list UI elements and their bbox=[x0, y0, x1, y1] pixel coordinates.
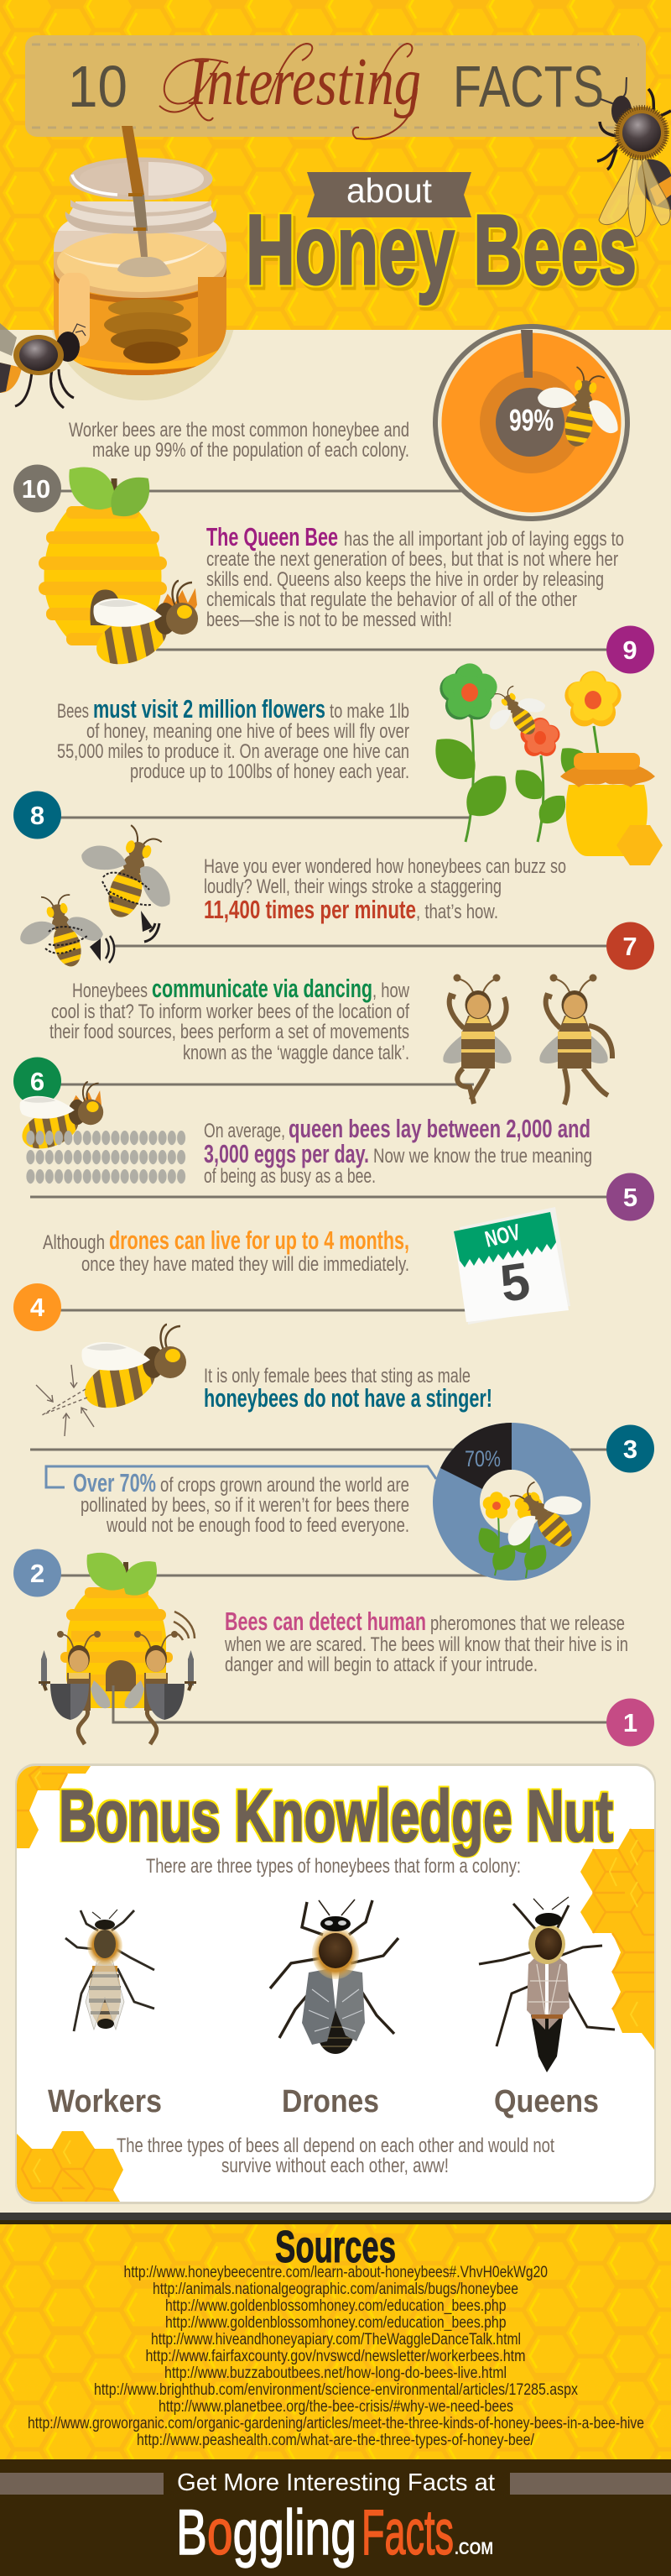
fact 3: divider line bbox=[30, 1449, 608, 1450]
fact 6: text: Honeybees bbox=[72, 980, 148, 1002]
fact 6: number badge bbox=[13, 1058, 61, 1105]
fact 8: number badge: 8 bbox=[30, 801, 44, 830]
icon: hive guarded by soldier bees bbox=[39, 1542, 196, 1744]
fact 6: number badge: 6 bbox=[30, 1067, 44, 1096]
title panel bbox=[25, 35, 646, 137]
fact 1: number badge bbox=[606, 1699, 654, 1746]
fact 9: text: chemicals that regulate the behavior of all of the other bbox=[206, 588, 577, 611]
fact 2: text: Over 70% bbox=[73, 1468, 156, 1497]
sources list: http://www.fairfaxcounty.gov/nvswcd/newsletter/workerbees.htm bbox=[146, 2348, 525, 2365]
fact 7: number badge bbox=[606, 922, 654, 970]
fact 5: text: 3,000 eggs per day. bbox=[204, 1139, 369, 1168]
fact 1: number badge: 1 bbox=[623, 1708, 637, 1737]
fact 2: number badge bbox=[13, 1549, 61, 1596]
fact 3: number badge: 3 bbox=[623, 1434, 637, 1464]
fact 8: number badge bbox=[13, 791, 61, 839]
fact 9: text: bees—she is not to be messed with! bbox=[206, 609, 452, 631]
fact 10: text bbox=[69, 419, 409, 462]
icon: bee in pie chart bbox=[530, 361, 627, 456]
about ribbon: about bbox=[346, 171, 433, 210]
fact 6: text: , how bbox=[372, 980, 410, 1002]
fact 6: text: cool is that? To inform worker bees of the location of bbox=[51, 1001, 409, 1023]
fact 8: text: 55,000 miles to produce it. On average one hive can bbox=[57, 740, 409, 763]
fact 6: text: communicate via dancing bbox=[152, 974, 372, 1003]
fact 1: text: danger and will begin to attack if your intrude. bbox=[225, 1654, 538, 1676]
icon: calendar NOV 5 bbox=[454, 1207, 570, 1325]
title: Interesting bbox=[159, 44, 421, 139]
label: Workers: Workers bbox=[48, 2084, 162, 2119]
bonus closing text: The three types of bees all depend on each other and would not bbox=[117, 2134, 554, 2157]
panel: bonus knowledge nut bbox=[15, 1763, 656, 2204]
fact 4: text: Although bbox=[43, 1231, 105, 1254]
illustration: queen bee bbox=[479, 1897, 615, 2072]
sources list: http://www.goldenblossomhoney.com/education_bees.php bbox=[165, 2314, 507, 2332]
fact 8: text: to make 1lb bbox=[330, 700, 409, 723]
bonus closing text: survive without each other, aww! bbox=[221, 2155, 449, 2177]
fact 9: number badge: 9 bbox=[622, 635, 637, 665]
sources list bbox=[28, 2264, 644, 2449]
70% label: 70% bbox=[465, 1446, 501, 1471]
fact 4: divider line bbox=[37, 1309, 466, 1311]
icon: calendar NOV 5: NOV bbox=[482, 1220, 523, 1252]
sources list: http://www.brighthub.com/environment/science-environmental/articles/17285.aspx bbox=[94, 2381, 578, 2399]
panel: footer bbox=[0, 2459, 671, 2576]
logo: BogglingFacts.com: .COM bbox=[455, 2539, 493, 2558]
fact 7: text bbox=[204, 855, 566, 924]
about ribbon bbox=[307, 171, 471, 217]
fact 6: text bbox=[49, 974, 410, 1064]
fact 3 text: sting: honeybees do not have a stinger! bbox=[204, 1383, 492, 1413]
fact 2: divider line bbox=[37, 1575, 491, 1576]
fact 2: text bbox=[73, 1468, 409, 1537]
sources list: http://www.planetbee.org/the-bee-crisis/#why-we-need-bees bbox=[159, 2398, 513, 2416]
fact 5: number badge bbox=[606, 1173, 654, 1220]
footer call to action: Get More Interesting Facts at bbox=[177, 2469, 495, 2496]
illustration: drone bee bbox=[270, 1899, 398, 2054]
fact 9: text: The Queen Bee bbox=[206, 522, 338, 551]
icon: flowers and bee in donut bbox=[473, 1464, 598, 1578]
fact 10: text: make up 99% of the population of each colony. bbox=[92, 439, 409, 462]
icon: jar shadow bbox=[52, 330, 233, 400]
sources list: http://www.peashealth.com/what-are-the-three-types-of-honey-bee/ bbox=[137, 2432, 535, 2449]
sources list: http://animals.nationalgeographic.com/animals/bugs/honeybee bbox=[153, 2281, 518, 2298]
illustration: worker bee bbox=[65, 1910, 154, 2031]
fact 8: text: Bees bbox=[57, 700, 89, 723]
label: Queens: Queens bbox=[494, 2084, 599, 2119]
sources list: http://www.hiveandhoneyapiary.com/TheWaggleDanceTalk.html bbox=[151, 2331, 521, 2349]
icon: flowers with bee and honey pot bbox=[424, 663, 663, 865]
icon: buzzing bees bbox=[11, 814, 188, 980]
bonus intro text: There are three types of honeybees that form a colony: bbox=[146, 1855, 521, 1878]
fact 5: number badge: 5 bbox=[623, 1183, 637, 1212]
title: 10: 10 bbox=[68, 54, 127, 119]
sources list: http://www.honeybeecentre.com/learn-about-honeybees#.VhvH0ekWg20 bbox=[124, 2264, 548, 2281]
fact 6: text: known as the ‘waggle dance talk’. bbox=[183, 1042, 409, 1064]
sources list: http://www.goldenblossomhoney.com/education_bees.php bbox=[165, 2297, 507, 2315]
donut chart 70% bbox=[433, 1423, 590, 1581]
fact 10: divider line bbox=[37, 490, 461, 492]
99% label: 99% bbox=[509, 403, 554, 437]
fact 9: divider line bbox=[156, 648, 608, 651]
fact 4: number badge: 4 bbox=[30, 1293, 45, 1322]
callout bracket to donut bbox=[46, 1466, 436, 1487]
fact 9: text bbox=[206, 522, 624, 631]
fact 7: text: , that’s how. bbox=[416, 901, 498, 923]
fact 8: divider line bbox=[37, 816, 470, 819]
fact 4: number badge bbox=[13, 1283, 61, 1331]
icon: bee without stinger bbox=[36, 1325, 186, 1436]
fact 10: number badge: 10 bbox=[22, 474, 50, 504]
fact 5: text: On average, bbox=[204, 1120, 285, 1142]
icon: dancing bee left bbox=[443, 974, 512, 1104]
fact 10: number badge bbox=[13, 465, 61, 512]
fact 5: text: Now we know the true meaning bbox=[373, 1145, 592, 1168]
fact 6: divider line bbox=[37, 1083, 474, 1086]
fact 5: text bbox=[204, 1114, 592, 1188]
logo: BogglingFacts.com: Facts bbox=[362, 2497, 454, 2568]
heading: Sources: Sources bbox=[275, 2222, 396, 2272]
fact 8: text: of honey, meaning one hive of bees will fly over bbox=[86, 720, 409, 743]
fact 3: number badge bbox=[606, 1425, 654, 1472]
fact 2: number badge: 2 bbox=[30, 1559, 44, 1588]
fact 4: text: drones can live for up to 4 months, bbox=[109, 1225, 409, 1255]
honeycomb corners bbox=[17, 1766, 654, 2202]
icon: left bee bbox=[0, 323, 86, 408]
fact 10: pie chart 99% bbox=[435, 327, 627, 519]
fact 4: text: once they have mated they will die immediately. bbox=[81, 1253, 409, 1276]
header: honeycomb background bbox=[0, 0, 671, 330]
title: Interesting: Interesting bbox=[188, 45, 421, 119]
fact 7: number badge: 7 bbox=[622, 932, 637, 961]
icon: dancing bee right bbox=[539, 974, 612, 1105]
dark band above sources bbox=[0, 2213, 671, 2224]
fact 7: text: 11,400 times per minute bbox=[204, 895, 416, 924]
fact 8: text: produce up to 100lbs of honey each year. bbox=[130, 760, 409, 783]
fact 4: text bbox=[43, 1225, 409, 1276]
fact 2: text: would not be enough food to feed everyone. bbox=[106, 1514, 409, 1537]
icon: honey jar with dipper bbox=[50, 126, 231, 386]
logo: BogglingFacts.com: Boggling bbox=[176, 2497, 356, 2568]
sources list: http://www.buzzaboutbees.net/how-long-do-bees-live.html bbox=[164, 2364, 507, 2382]
panel: sources bbox=[0, 2224, 671, 2459]
fact 7: divider line bbox=[115, 945, 608, 947]
fact 6: text: their food sources, bees perform a set of movements bbox=[49, 1021, 409, 1043]
fact 3 text: sting bbox=[204, 1365, 492, 1413]
fact 8: text bbox=[57, 694, 409, 783]
fact 5: divider line bbox=[30, 1195, 608, 1199]
fact 3 text: sting: It is only female bees that sting as male bbox=[204, 1365, 471, 1387]
fact 2: text: of crops grown around the world are bbox=[160, 1474, 409, 1497]
label: Drones: Drones bbox=[282, 2084, 379, 2119]
title: FACTS: FACTS bbox=[453, 54, 604, 119]
fact 1: text: Bees can detect human bbox=[225, 1607, 426, 1636]
fact 1: connector line bbox=[113, 1685, 608, 1722]
fact 2: text: pollinated by bees, so if it weren’t for bees there bbox=[81, 1494, 409, 1517]
fact 7: text: loudly? Well, their wings stroke a staggering bbox=[204, 875, 502, 898]
bonus closing text bbox=[117, 2134, 554, 2177]
icon: top right bee bbox=[597, 77, 671, 237]
icon: beehive with queen bee bbox=[39, 455, 198, 674]
fact 5: text: of being as busy as a bee. bbox=[204, 1165, 376, 1188]
fact 1: text bbox=[224, 1607, 628, 1676]
icon: queen bee laying eggs bbox=[17, 1082, 186, 1185]
icon: calendar NOV 5: 5 bbox=[497, 1252, 533, 1314]
fact 9: number badge bbox=[606, 626, 654, 673]
fact 10: text: Worker bees are the most common honeybee and bbox=[69, 419, 409, 442]
fact 8: text: must visit 2 million flowers bbox=[93, 694, 325, 724]
